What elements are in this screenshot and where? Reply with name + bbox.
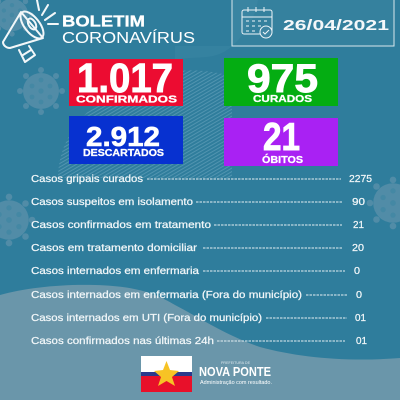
row 5: 0 [354, 265, 360, 277]
icon: megaphone [3, 0, 58, 62]
logo text: Nova Ponte: PREFEITURA DE [221, 361, 251, 365]
row 7 [31, 312, 366, 324]
heading: BOLETIM [62, 14, 145, 30]
row 2: 90 [352, 196, 365, 208]
row 1: 2275 [349, 173, 372, 185]
panel: descartados [69, 116, 183, 164]
row 7: Casos internados em UTI (Fora do município) [31, 312, 262, 324]
row 4: Casos em tratamento domiciliar [31, 242, 198, 254]
row 8: Casos confirmados nas últimas 24h [31, 335, 214, 347]
panel: obitos [224, 116, 338, 166]
row 5 [31, 265, 360, 277]
heading [62, 14, 195, 47]
row 1 [31, 173, 372, 185]
row 4 [31, 242, 364, 254]
panel: descartados: DESCARTADOS [83, 148, 164, 159]
heading: CORONAVÍRUS [62, 30, 195, 47]
date box [232, 0, 394, 46]
panel: confirmados: 1.017 [77, 55, 173, 101]
row 3: 21 [353, 219, 364, 231]
logo text: Nova Ponte: Administração com resultado. [200, 380, 272, 386]
date box: 26/04/2021 [283, 17, 389, 34]
row 4: 20 [352, 242, 364, 254]
panel: confirmados: CONFIRMADOS [76, 94, 177, 106]
row 7: 01 [355, 312, 366, 324]
row 5: Casos internados em enfermaria [31, 265, 199, 277]
logo text: Nova Ponte: NOVA PONTE [199, 365, 271, 379]
row 8: 01 [356, 335, 367, 347]
row 3 [31, 219, 364, 231]
statistics list [31, 173, 372, 347]
panel: curados [224, 57, 338, 106]
row 6: 0 [356, 289, 362, 301]
panel: descartados: 2.912 [86, 121, 160, 152]
panel: curados: CURADOS [253, 94, 312, 105]
panel: curados: 975 [247, 57, 318, 101]
logo text: Nova Ponte [199, 361, 272, 386]
row 6: Casos internados em enfermaria (Fora do município) [31, 289, 302, 301]
virus decorations [0, 0, 400, 246]
icon: flag of Nova Ponte [141, 356, 192, 392]
row 1: Casos gripais curados [31, 173, 143, 185]
decorative waves [0, 285, 400, 400]
panel: obitos: ÓBITOS [262, 153, 303, 166]
row 2 [31, 196, 365, 208]
row 8 [31, 335, 367, 347]
panel: obitos: 21 [263, 116, 300, 159]
icon: calendar [242, 7, 272, 38]
row 2: Casos suspeitos em isolamento [31, 196, 193, 208]
row 3: Casos confirmados em tratamento [31, 219, 211, 231]
